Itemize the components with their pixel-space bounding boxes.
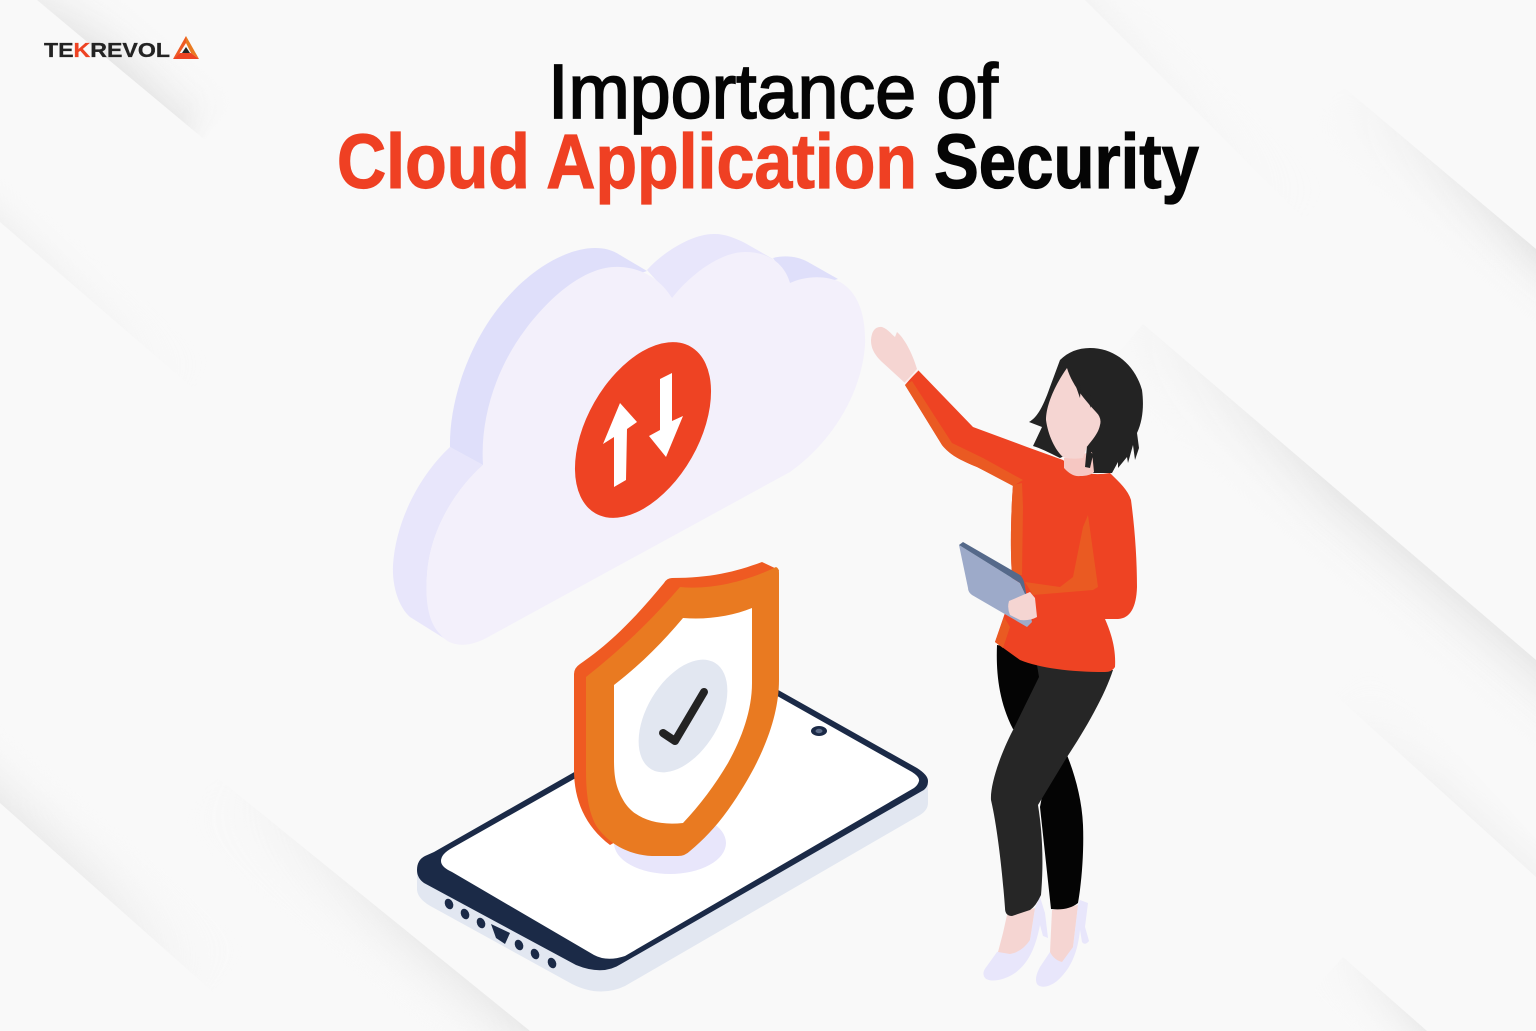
sweater xyxy=(905,370,1137,672)
title xyxy=(337,49,1199,205)
holding hand xyxy=(1008,592,1037,620)
phone screen xyxy=(441,680,919,959)
front leg xyxy=(991,665,1113,916)
icon: red transfer badge xyxy=(547,319,739,541)
icon: check mark xyxy=(663,692,704,741)
sweater shading xyxy=(905,381,1098,648)
raised hand xyxy=(871,327,917,383)
shield check badge xyxy=(620,644,746,788)
shield front xyxy=(586,567,779,856)
icon: up arrow xyxy=(603,403,637,487)
hair strands over face xyxy=(1073,378,1093,468)
cloud illustration xyxy=(393,234,865,645)
feet xyxy=(998,905,1078,962)
back leg xyxy=(997,645,1083,909)
icon: down arrow xyxy=(649,373,683,457)
face xyxy=(1046,368,1100,459)
logo wordmark: TEKREVOL xyxy=(44,40,170,62)
title line 1: Importance of xyxy=(548,49,999,135)
shoes xyxy=(983,897,1089,987)
security shield xyxy=(574,562,779,856)
tablet xyxy=(959,542,1032,627)
shield side xyxy=(574,562,779,845)
cloud front face xyxy=(426,252,865,645)
phone body xyxy=(417,673,928,970)
title line 2: black part: Security xyxy=(934,119,1199,205)
neck xyxy=(1064,452,1094,476)
phone ports xyxy=(443,897,558,970)
phone camera xyxy=(811,726,827,736)
woman figure xyxy=(871,327,1143,987)
smartphone xyxy=(417,673,928,992)
phone side xyxy=(417,780,928,992)
cloud side faces xyxy=(393,234,838,642)
hair xyxy=(1029,348,1143,473)
logo: Tekrevol xyxy=(44,36,199,62)
title line 2: red part: Cloud Application xyxy=(337,119,917,205)
sleeve cuff xyxy=(905,370,918,383)
shield inner panel xyxy=(614,608,752,824)
shield shadow on phone xyxy=(614,812,726,874)
logo triangle icon xyxy=(173,36,199,59)
